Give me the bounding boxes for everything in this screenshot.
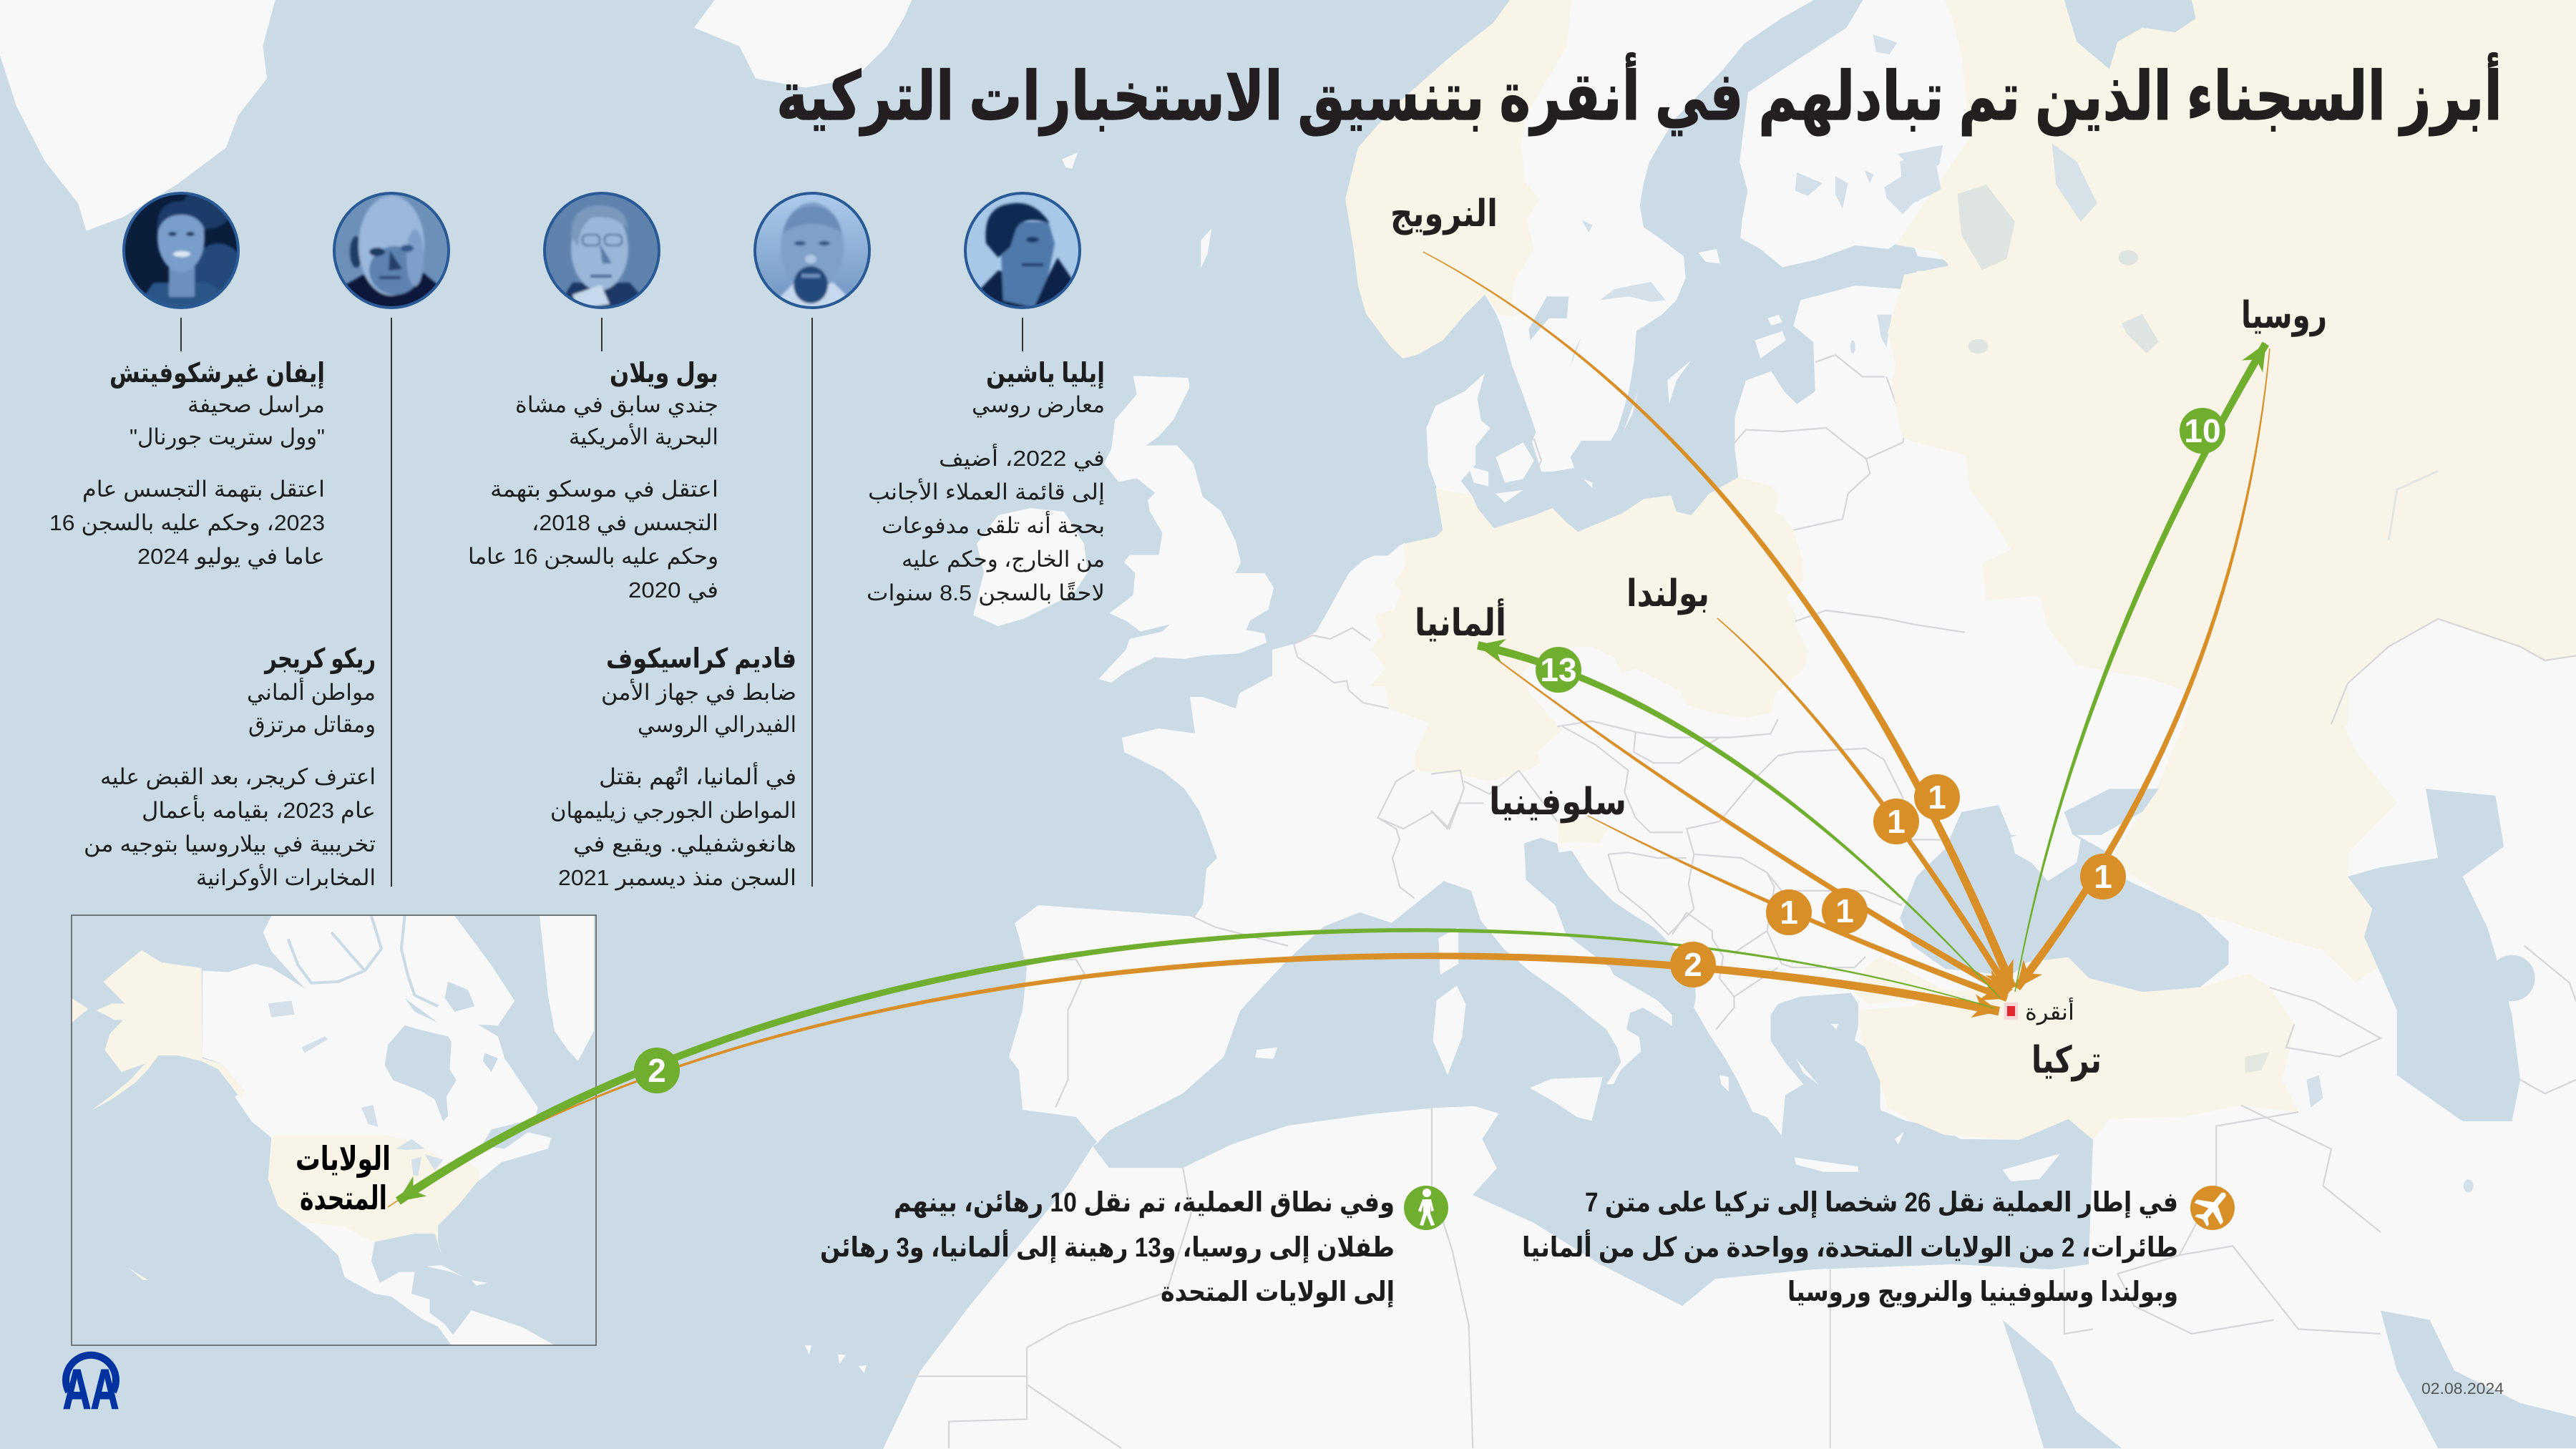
text block: Rico Krieger: عام 2023، بقيامه بأعمال bbox=[142, 795, 376, 823]
badge: Norway 1: 1 bbox=[1928, 779, 1946, 816]
text block: Vadim Krasikov: الفيدرالي الروسي bbox=[638, 712, 796, 738]
text block: Rico Krieger bbox=[84, 644, 376, 891]
text: walker note: وفي نطاق العملية، تم نقل 10 رهائن، بينهم bbox=[894, 1188, 1395, 1219]
text block: Paul Whelan: التجسس في 2018، bbox=[532, 510, 718, 536]
text block: Evan Gershkovich: 2023، وحكم عليه بالسجن 16 bbox=[49, 510, 325, 536]
logo: AA bbox=[63, 1355, 119, 1420]
photo: Vadim Krasikov bbox=[755, 193, 869, 315]
text block: Ilya Yashin: بحجة أنه تلقى مدفوعات bbox=[882, 511, 1105, 539]
text block: Ilya Yashin: إلى قائمة العملاء الأجانب bbox=[868, 478, 1105, 505]
photo: Ilya Yashin bbox=[965, 193, 1080, 315]
text block: Vadim Krasikov: المواطن الجورجي زيليمهان bbox=[550, 798, 796, 824]
badge: Germany 13: 13 bbox=[1540, 651, 1577, 688]
text: walker note bbox=[820, 1188, 1395, 1308]
text block: Vadim Krasikov: السجن منذ ديسمبر 2021 bbox=[558, 865, 796, 891]
label: Germany: ألمانيا bbox=[1415, 598, 1506, 644]
text block: Evan Gershkovich: اعتقل بتهمة التجسس عام bbox=[82, 477, 325, 502]
text: plane note: في إطار العملية نقل 26 شخصا إلى تركيا على متن 7 bbox=[1585, 1188, 2178, 1219]
inset map: North America bbox=[72, 915, 596, 1345]
text block: Evan Gershkovich bbox=[49, 358, 325, 570]
text block: Ilya Yashin: من الخارج، وحكم عليه bbox=[902, 547, 1105, 572]
text block: Rico Krieger: ومقاتل مرتزق bbox=[248, 712, 376, 738]
text block: Ilya Yashin: في 2022، أضيف bbox=[939, 444, 1105, 472]
text block: Paul Whelan bbox=[468, 358, 718, 603]
label: United States bbox=[296, 1140, 391, 1216]
text block: Paul Whelan: بول ويلان bbox=[610, 358, 718, 389]
text block: Rico Krieger: مواطن ألماني bbox=[247, 678, 376, 706]
icon: walking person bbox=[1404, 1186, 1448, 1230]
photo: Paul Whelan bbox=[545, 193, 659, 311]
arrows: hostages from Turkey (green) bbox=[393, 338, 2275, 1209]
badge: Russia 1 bbox=[2080, 854, 2126, 899]
connector line: Yashin bbox=[1022, 318, 1023, 351]
text block: Evan Gershkovich: عاما في يوليو 2024 bbox=[137, 544, 325, 570]
badge: Russia 1: 1 bbox=[2094, 858, 2112, 895]
badge: Russia 10: 10 bbox=[2184, 412, 2221, 449]
text block: Ilya Yashin: معارض روسي bbox=[972, 392, 1105, 418]
logo: AA: AA bbox=[63, 1357, 119, 1420]
text: plane note bbox=[1522, 1188, 2178, 1308]
text block: Evan Gershkovich: إيفان غيرشكوفيتش bbox=[109, 358, 325, 389]
text block: Paul Whelan: في 2020 bbox=[628, 577, 718, 603]
icon: plane bbox=[2188, 1182, 2238, 1233]
photo: Evan Gershkovich bbox=[122, 192, 240, 309]
badge: Norway 1 bbox=[1914, 774, 1960, 820]
text block: Rico Krieger: ريكو كريجر bbox=[263, 644, 376, 674]
text block: Ilya Yashin bbox=[867, 358, 1105, 606]
text block: Ilya Yashin: لاحقًا بالسجن 8.5 سنوات bbox=[867, 580, 1105, 606]
label: United States: المتحدة bbox=[300, 1179, 387, 1216]
badge: Slovenia 1: 1 bbox=[1780, 894, 1798, 931]
connector line: Krieger bbox=[391, 318, 392, 887]
badge: Germany 13 bbox=[1536, 647, 1581, 693]
text block: Paul Whelan: اعتقل في موسكو بتهمة bbox=[490, 477, 718, 502]
badge: Poland 1: 1 bbox=[1887, 803, 1906, 840]
label: United States: الولايات bbox=[296, 1140, 391, 1178]
text: plane note: وبولندا وسلوفينيا والنرويج وروسيا bbox=[1787, 1277, 2178, 1308]
text block: Vadim Krasikov: ضابط في جهاز الأمن bbox=[601, 678, 796, 706]
label: Turkey: تركيا bbox=[2031, 1040, 2102, 1082]
arrows: flights to Turkey (orange) bbox=[388, 252, 2270, 1207]
badge: USA 2 orange bbox=[1670, 942, 1716, 987]
label: Poland: بولندا bbox=[1626, 573, 1709, 615]
badge: USA 2 green bbox=[634, 1048, 680, 1093]
text block: Vadim Krasikov bbox=[550, 644, 796, 891]
connector line: Gershkovich bbox=[180, 318, 182, 351]
label: Russia: روسيا bbox=[2241, 295, 2327, 337]
date: 02.08.2024 bbox=[2421, 1380, 2504, 1397]
text block: Vadim Krasikov: في ألمانيا، اتُهم بقتل bbox=[599, 762, 796, 790]
connector line: Krasikov bbox=[811, 318, 813, 887]
text block: Vadim Krasikov: هانغوشفيلي. ويقبع في bbox=[573, 831, 796, 857]
badge: USA 2 green: 2 bbox=[648, 1052, 666, 1089]
connector line: Whelan bbox=[601, 318, 602, 351]
text block: Rico Krieger: المخابرات الأوكرانية bbox=[196, 864, 376, 891]
text block: Paul Whelan: البحرية الأمريكية bbox=[569, 423, 718, 450]
badge: Slovenia 1 bbox=[1766, 889, 1812, 935]
badge: Russia 10 bbox=[2180, 408, 2225, 454]
text block: Rico Krieger: تخريبية في بيلاروسيا بتوجيه من bbox=[84, 831, 376, 857]
text block: Vadim Krasikov: فاديم كراسيكوف bbox=[606, 644, 796, 675]
text block: Evan Gershkovich: "وول ستريت جورنال" bbox=[130, 424, 325, 450]
text block: Paul Whelan: وحكم عليه بالسجن 16 عاما bbox=[468, 544, 718, 570]
text block: Ilya Yashin: إيليا ياشين bbox=[986, 358, 1105, 389]
badge: Germany 1 bbox=[1822, 888, 1868, 934]
text: plane note: طائرات، 2 من الولايات المتحدة، وواحدة من كل من ألمانيا bbox=[1522, 1229, 2178, 1264]
label: Norway: النرويج bbox=[1390, 193, 1498, 235]
badge: USA 2 orange: 2 bbox=[1684, 946, 1702, 983]
label: Slovenia: سلوفينيا bbox=[1489, 781, 1626, 824]
text block: Evan Gershkovich: مراسل صحيفة bbox=[187, 392, 325, 418]
photo: Rico Krieger bbox=[334, 193, 449, 315]
marker: Ankara bbox=[2004, 997, 2074, 1025]
text block: Paul Whelan: جندي سابق في مشاة bbox=[515, 392, 718, 418]
badge: Poland 1 bbox=[1873, 799, 1919, 844]
text: walker note: إلى الولايات المتحدة bbox=[1161, 1277, 1395, 1308]
text: walker note: طفلان إلى روسيا، و13 رهينة إلى ألمانيا، و3 رهائن bbox=[820, 1229, 1395, 1264]
badge: Germany 1: 1 bbox=[1835, 892, 1854, 930]
marker: Ankara: أنقرة bbox=[2025, 997, 2074, 1025]
text block: Rico Krieger: اعترف كريجر، بعد القبض عليه bbox=[100, 764, 376, 790]
